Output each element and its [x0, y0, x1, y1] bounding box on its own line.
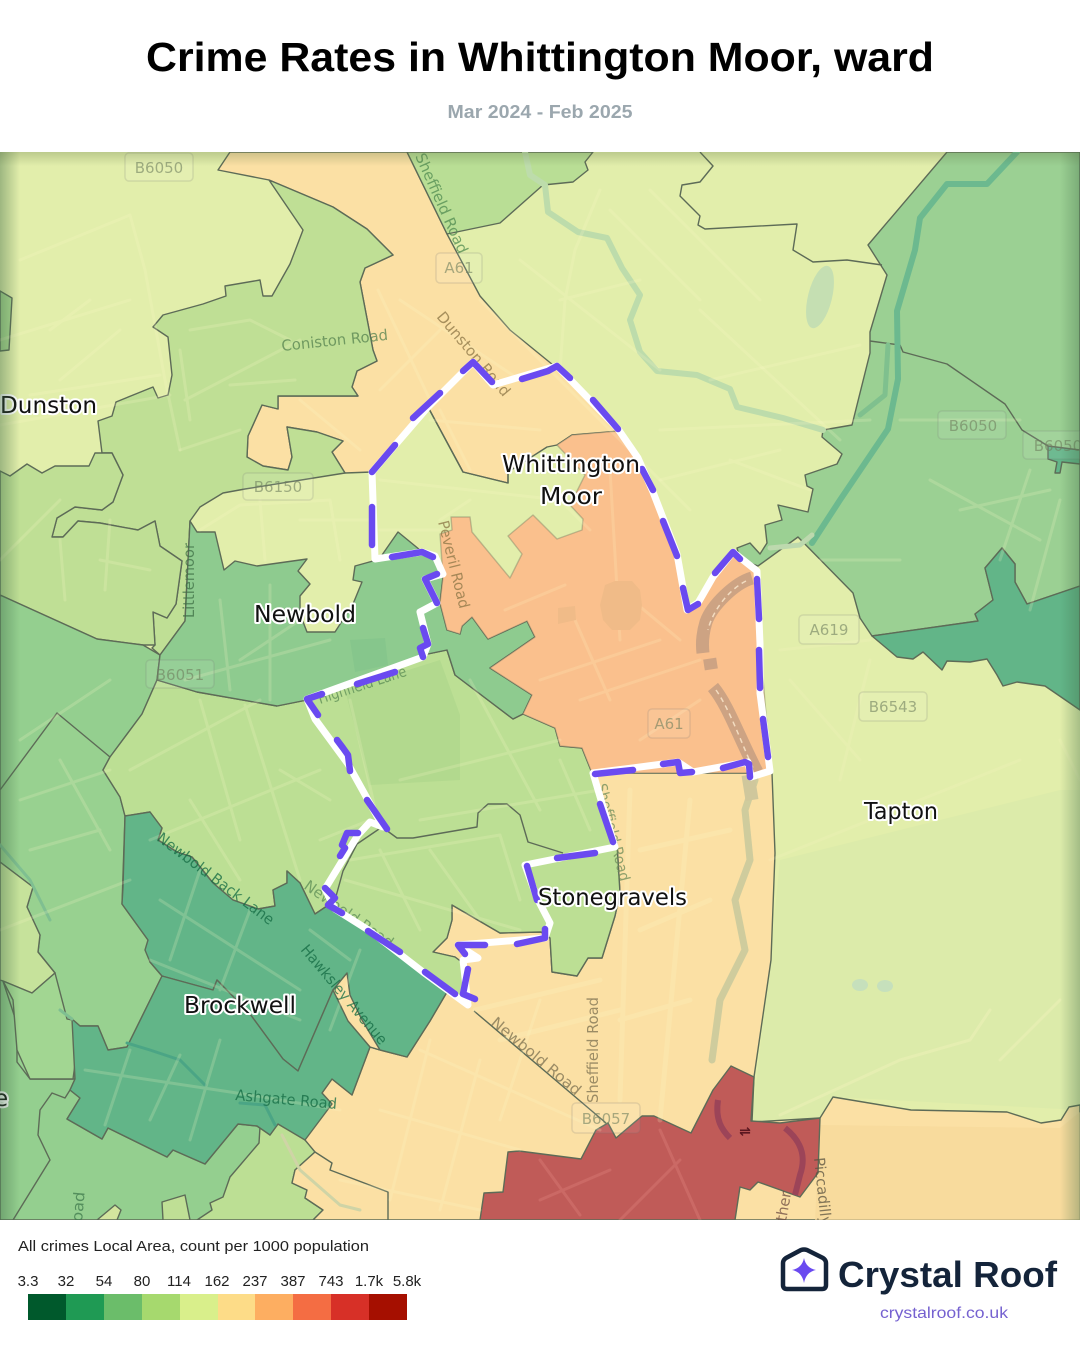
area: mid green south-west: [0, 594, 260, 1220]
place names: Tapton: [863, 799, 938, 825]
place names: Newbold: [254, 602, 356, 628]
road shields: B6051: [156, 666, 204, 684]
legend value labels: 3.3: [18, 1273, 38, 1290]
road shields: A61: [654, 715, 684, 733]
legend value labels: 743: [318, 1273, 344, 1290]
stadium: [600, 581, 642, 630]
area: Brockwell south: [67, 976, 370, 1164]
legend colour scale: [28, 1294, 407, 1320]
logo: [783, 1250, 1058, 1322]
road shields: B6057: [582, 1110, 630, 1128]
railway in orange zone: [702, 578, 757, 800]
legend value labels: 80: [134, 1273, 150, 1290]
ward boundary: white base: [307, 362, 770, 1005]
title: Crime Rates in Whittington Moor, ward: [146, 34, 934, 80]
area: central light-green ward: [103, 650, 620, 996]
place names: Whittington: [502, 452, 640, 478]
area: Tapton park tint: [752, 790, 1080, 1122]
road names: Newbold Back Lane: [154, 829, 278, 929]
road shields: B6543: [869, 698, 917, 716]
legend value labels: 32: [58, 1273, 74, 1290]
area: darker tan east: [815, 1112, 1080, 1220]
road names: Newbold Road: [487, 1013, 585, 1099]
subtitle: date range: Mar 2024 - Feb 2025: [448, 102, 632, 122]
place names: [0, 393, 938, 1112]
road names: Highfield Lane: [316, 662, 409, 708]
road names: Dunston Road: [433, 308, 514, 400]
area: Newbold ward: [157, 521, 535, 719]
road network: [0, 190, 1080, 1220]
area: northern tan corridor: [218, 152, 622, 483]
legend value labels: 1.7k: [355, 1273, 384, 1290]
road shields: B6050: [949, 417, 997, 435]
legend value labels: [18, 1273, 422, 1290]
legend value labels: 387: [280, 1273, 306, 1290]
road names: Littlemoor: [180, 542, 198, 618]
wordmark: Crystal Roof: [838, 1254, 1058, 1295]
road names: oad: [68, 1191, 89, 1222]
area: western light green below Dunston: [0, 453, 182, 645]
legend value labels: 54: [96, 1273, 112, 1290]
road names: Sheffield Road: [411, 150, 472, 256]
area: eastern dark green band: [872, 548, 1080, 710]
area: small western fragment: [0, 291, 12, 351]
area: Coniston ward: [52, 180, 393, 655]
road names: Piccadilly: [810, 1157, 835, 1226]
road names: Coniston Road: [281, 326, 389, 355]
legend value labels: 114: [167, 1273, 191, 1290]
legend: [18, 1239, 422, 1320]
road names: ther: [772, 1189, 795, 1223]
road names: Peveril Road: [434, 519, 473, 610]
railway centre line: [708, 581, 754, 770]
place names: Moor: [540, 484, 603, 510]
map edge vignette: [0, 152, 1080, 1220]
area: very high crime town centre: [480, 1066, 820, 1220]
road shields: B6050: [135, 159, 183, 177]
road shields: A61: [444, 259, 474, 277]
station symbol: ⇌: [739, 1123, 751, 1139]
ward boundary: purple dashes: [307, 362, 768, 999]
area: southern tan district: [292, 773, 1080, 1220]
road names: Newbold Road: [301, 877, 397, 952]
road names: Hawksley Avenue: [297, 941, 391, 1048]
area: south-west sub-wards: [0, 713, 323, 1220]
road shields: [125, 153, 1080, 1133]
place names: Stonegravels: [538, 885, 687, 911]
rivers and water: [0, 152, 1017, 1210]
road names: Ashgate Road: [235, 1086, 338, 1113]
road names: Sheffield Road: [584, 997, 602, 1103]
road names: [68, 150, 835, 1226]
icon: house with star: [783, 1250, 826, 1289]
road shields: A619: [810, 621, 848, 639]
area: eastern green ward: [737, 152, 1080, 636]
road shields: B6150: [254, 478, 302, 496]
area: green strip north of A61: [407, 152, 593, 234]
railway in the town centre: [717, 1100, 803, 1195]
choropleth map: [0, 150, 1080, 1226]
website: crystalroof.co.uk: [880, 1305, 1009, 1322]
legend value labels: 237: [242, 1273, 268, 1290]
area: Brockwell north: [122, 812, 447, 1071]
legend value labels: 162: [204, 1273, 230, 1290]
road names: Sheffield Road: [592, 782, 634, 883]
boundary lines: [428, 152, 1048, 1123]
area: high crime orange zone: [440, 431, 772, 773]
area: Hawksley tan strip: [333, 973, 380, 1050]
area: eastern small dark fragment: [1048, 446, 1080, 473]
place names: Dunston: [0, 393, 97, 419]
place names: Brockwell: [184, 993, 296, 1019]
legend value labels: 5.8k: [393, 1273, 422, 1290]
legend title: All crimes Local Area, count per 1000 population: [18, 1239, 369, 1255]
